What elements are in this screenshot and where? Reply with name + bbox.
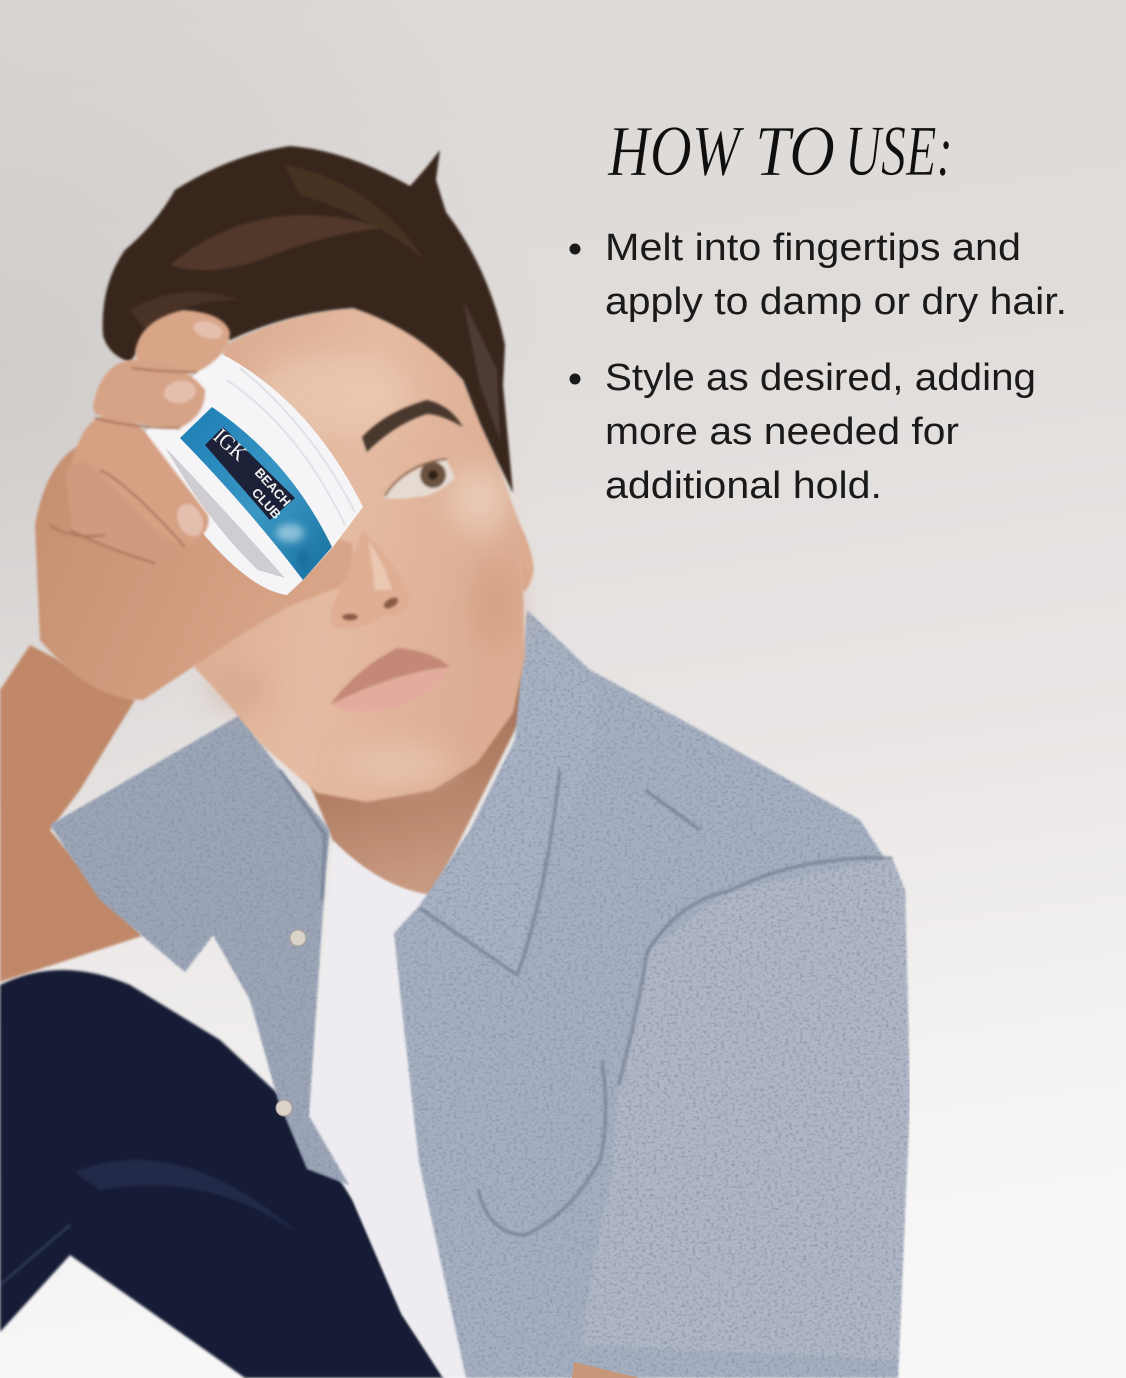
shirt buttons — [276, 930, 306, 1116]
nose — [330, 530, 410, 629]
fingers — [50, 310, 230, 564]
shirt: left panel and sleeve — [50, 715, 349, 1185]
eyebrow — [362, 400, 463, 452]
jeans — [0, 970, 445, 1378]
step two, line three: additional hold. — [605, 465, 882, 507]
forearm — [0, 645, 142, 982]
small skin at sleeve cuff — [572, 1362, 640, 1378]
jar brand text: IGK — [209, 423, 252, 466]
shirt: pocket — [478, 1160, 605, 1378]
face highlights — [210, 355, 519, 785]
index finger — [135, 310, 230, 372]
jar body — [145, 353, 363, 595]
shirt: sleeve — [574, 858, 910, 1360]
little finger — [65, 461, 180, 564]
step two, line two: more as needed for — [605, 411, 959, 453]
finger creases — [50, 368, 197, 563]
title word: to: TO — [755, 111, 835, 191]
title word: use: USE: — [845, 111, 953, 191]
bullet one — [570, 244, 580, 254]
step one, line two: apply to damp or dry hair. — [605, 281, 1067, 323]
hair — [103, 146, 513, 493]
jar lower shade — [165, 447, 285, 578]
shirt — [50, 610, 910, 1378]
step two, line one: Style as desired, adding — [605, 357, 1036, 399]
instruction list — [570, 227, 1067, 507]
shirt: collar — [420, 610, 598, 975]
step one, line one: Melt into fingertips and — [605, 227, 1021, 269]
jar product text line two: CLUB — [249, 485, 284, 522]
ear — [515, 515, 534, 592]
white t-shirt — [309, 841, 466, 1378]
title word: how: HOW — [607, 111, 745, 191]
shirt: back and body — [394, 610, 910, 1378]
finger nails — [163, 318, 225, 540]
eye — [383, 459, 455, 499]
jar lid grooves — [227, 368, 355, 525]
jar label dark panel — [205, 427, 295, 520]
jar label — [180, 407, 332, 580]
face — [190, 308, 525, 802]
product jar — [145, 353, 363, 595]
lips — [330, 648, 450, 712]
hand — [35, 417, 353, 700]
ring finger — [70, 417, 209, 547]
neck — [300, 650, 525, 900]
bullet two — [570, 374, 580, 384]
shirt seams and folds — [280, 770, 892, 1235]
middle finger — [93, 360, 205, 428]
jar product text: BEACH — [252, 465, 294, 509]
model photo illustration — [0, 146, 910, 1378]
title — [607, 111, 953, 191]
jar label clouds — [276, 524, 308, 568]
